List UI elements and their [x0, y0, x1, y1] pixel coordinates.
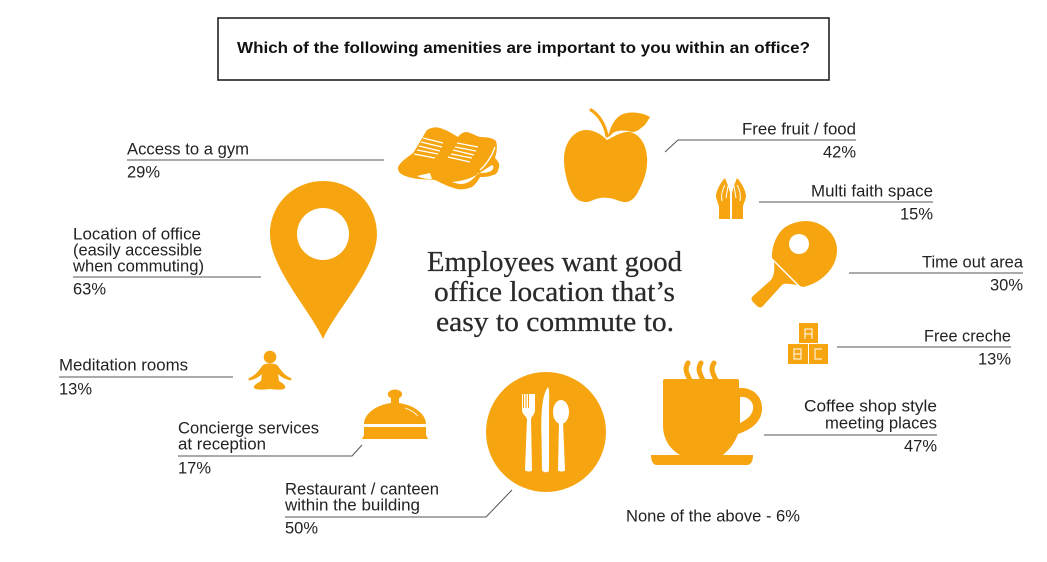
label: access to a gym: Access to a gym [127, 140, 249, 158]
label: time out area [849, 254, 1024, 294]
label: location of office: 63% [73, 280, 106, 298]
label: free creche: 13% [978, 350, 1011, 368]
central message: easy to commute to. [436, 307, 674, 338]
label: restaurant / canteen: Restaurant / canteen [285, 480, 439, 498]
label: concierge services: 17% [178, 460, 211, 478]
label: access to a gym: 29% [127, 164, 160, 182]
label: free creche: Free creche [924, 328, 1011, 346]
icon: alphabet blocks [788, 323, 828, 364]
label: location of office: when commuting) [72, 258, 204, 276]
label: restaurant / canteen: 50% [285, 520, 318, 538]
label: meditation rooms: 13% [59, 380, 92, 398]
central message [427, 247, 682, 338]
label: none of the above: None of the above - 6% [626, 508, 800, 526]
icon: running shoes [398, 127, 499, 189]
label: location of office [72, 226, 261, 298]
label: access to a gym [127, 140, 384, 182]
icon: coffee cup [651, 363, 762, 465]
label: free creche [837, 328, 1011, 368]
label: concierge services [178, 420, 362, 478]
label: multi faith space: Multi faith space [811, 182, 933, 200]
label: multi faith space [759, 182, 933, 224]
icon: apple [564, 110, 650, 202]
label: restaurant / canteen [284, 480, 512, 538]
label: coffee shop: 47% [904, 438, 937, 456]
label: free fruit / food [665, 120, 856, 162]
label: location of office: (easily accessible [73, 242, 202, 260]
icon: concierge bell [362, 390, 428, 439]
icon: location pin [270, 181, 377, 339]
label: meditation rooms [59, 356, 233, 398]
icon: plate with cutlery [486, 372, 606, 492]
label: meditation rooms: Meditation rooms [59, 356, 188, 374]
icon: praying hands [716, 178, 746, 219]
label: multi faith space: 15% [900, 206, 933, 224]
label: free fruit / food: 42% [823, 144, 856, 162]
label: restaurant / canteen: within the building [284, 496, 420, 514]
label: coffee shop [764, 398, 937, 456]
icon: table tennis paddle [752, 221, 837, 307]
icon: meditating person [249, 351, 291, 390]
label: time out area: 30% [990, 276, 1023, 294]
label: free fruit / food: Free fruit / food [742, 120, 856, 138]
title box: Which of the following amenities are important to you within an office? [237, 40, 810, 57]
title box [218, 18, 829, 80]
label: concierge services: Concierge services [178, 420, 319, 438]
label: concierge services: at reception [178, 436, 266, 454]
central message: Employees want good [427, 247, 682, 278]
label: coffee shop: meeting places [825, 414, 937, 432]
label: coffee shop: Coffee shop style [804, 398, 937, 416]
label: location of office: Location of office [73, 226, 201, 244]
central message: office location that’s [434, 277, 675, 308]
label: time out area: Time out area [922, 254, 1024, 272]
